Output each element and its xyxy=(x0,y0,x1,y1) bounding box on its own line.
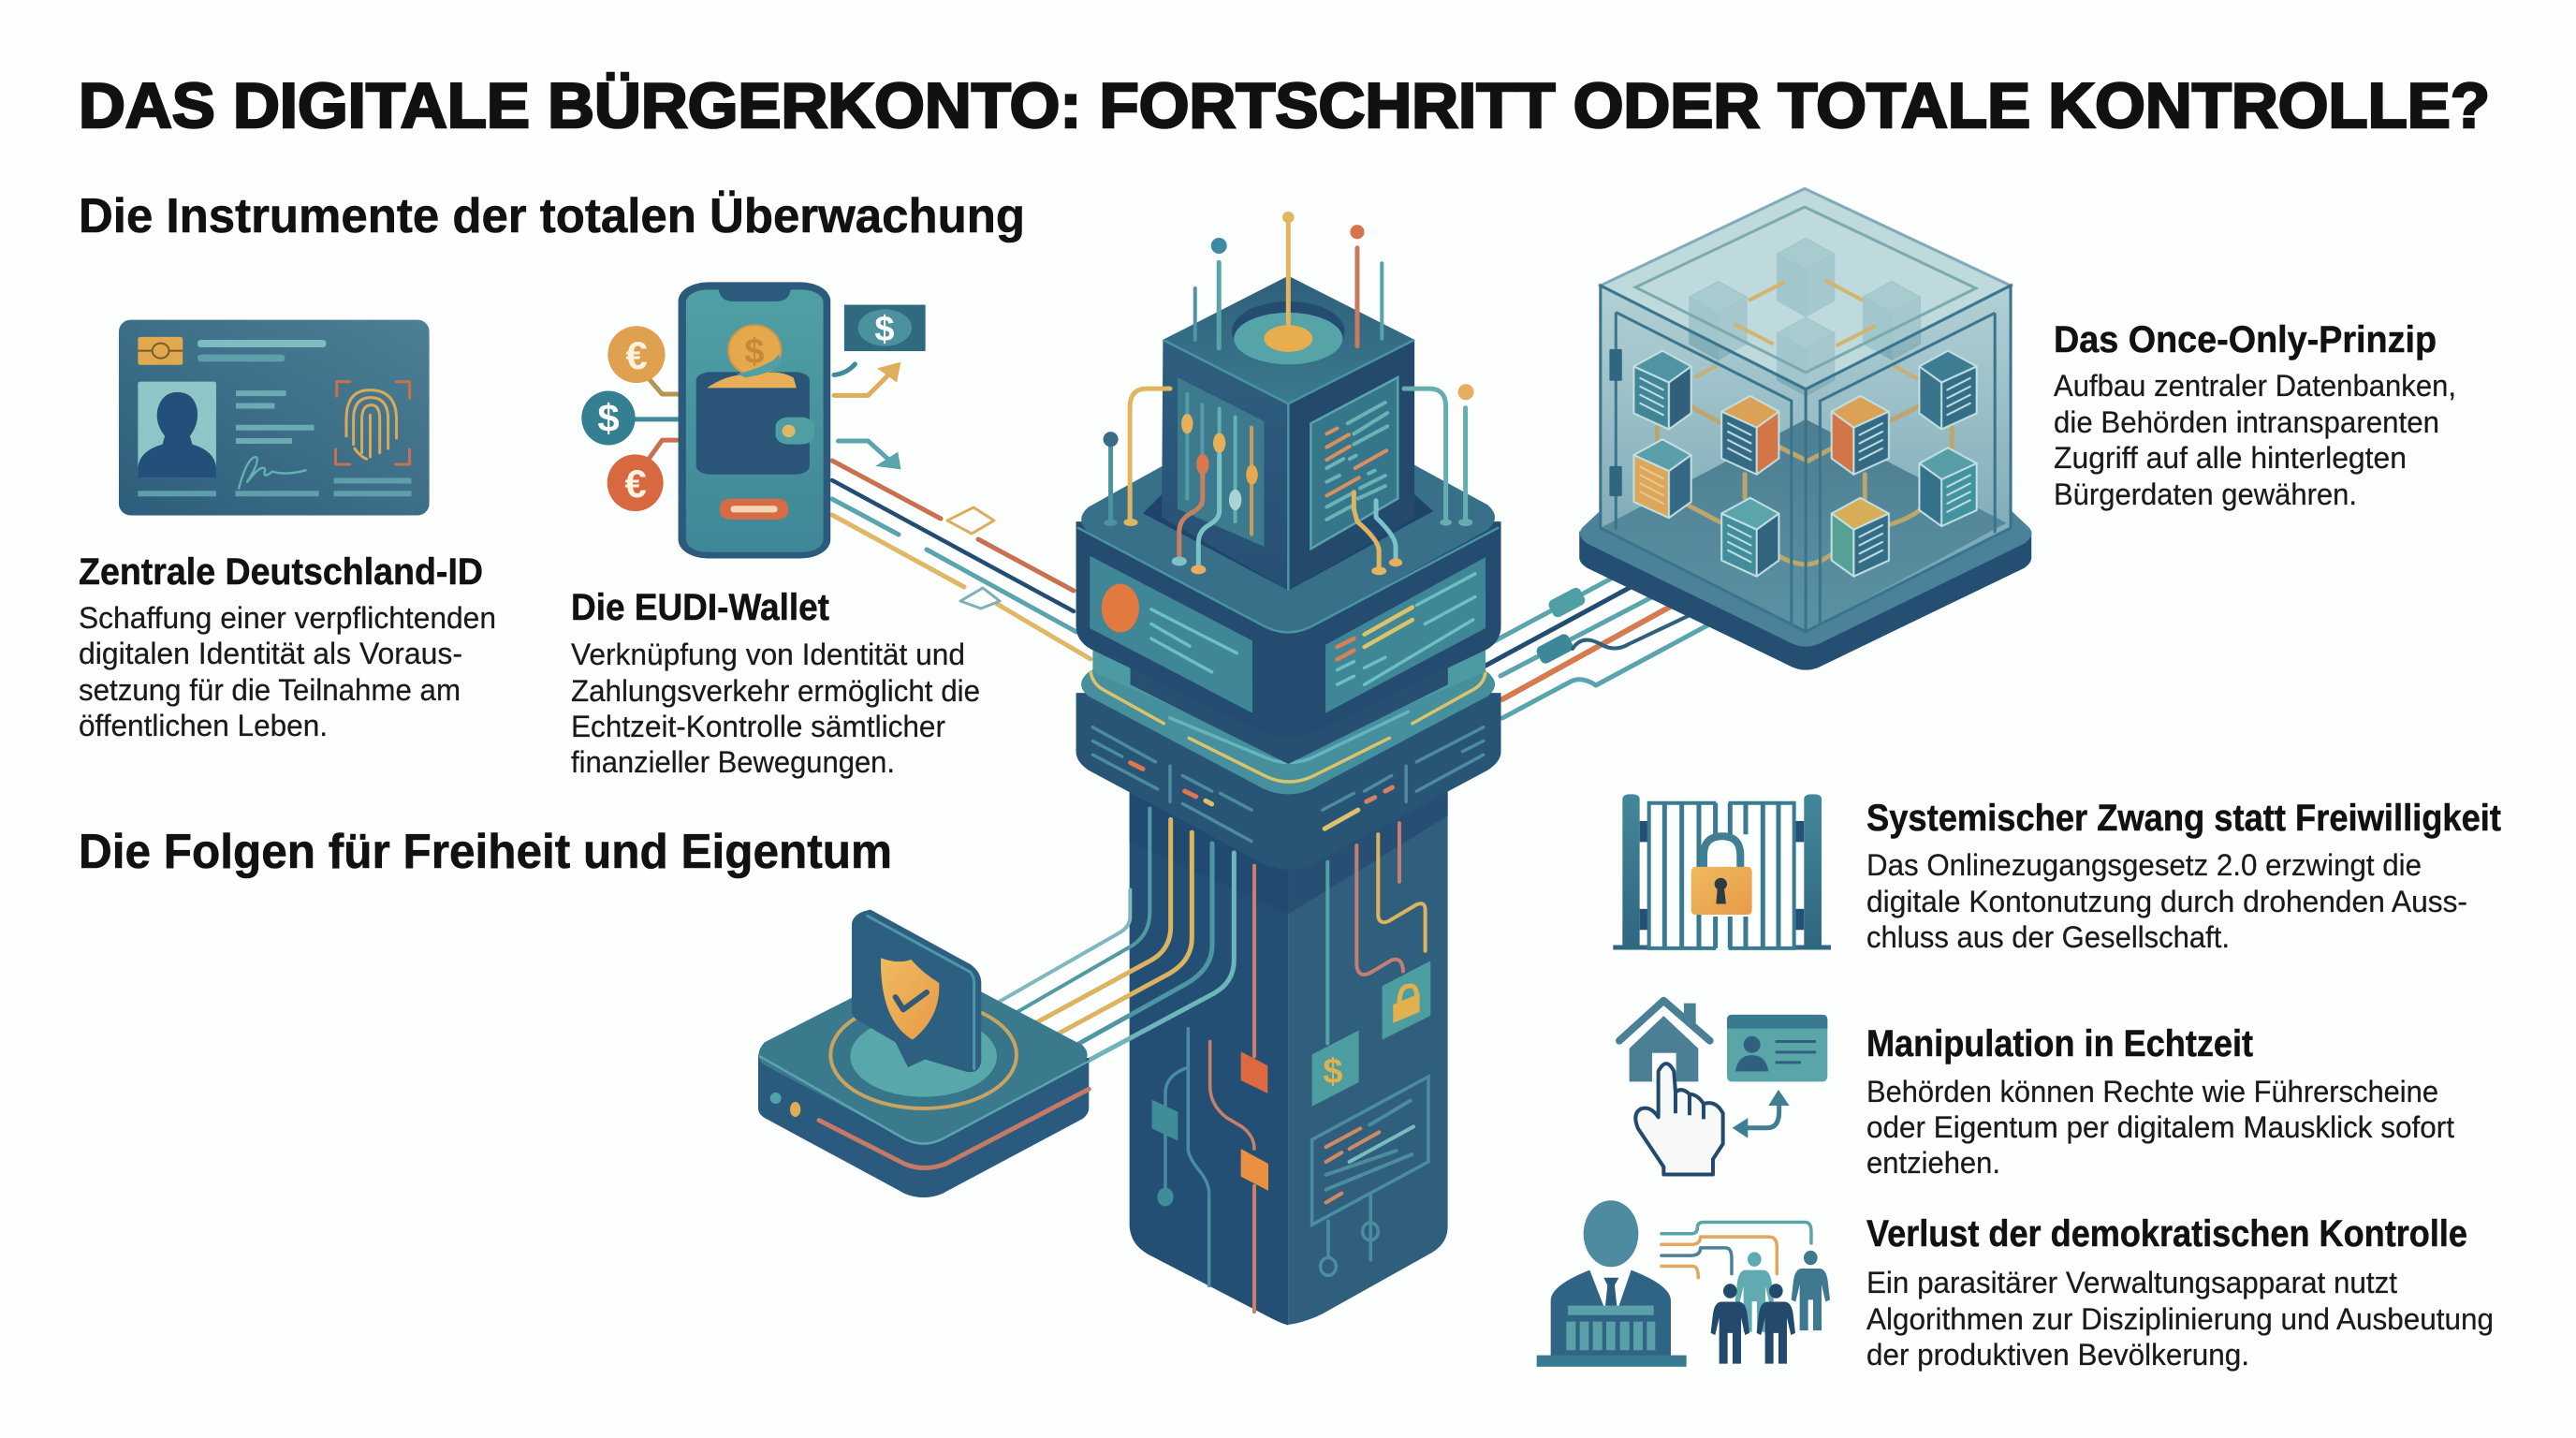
screens on block xyxy=(1090,556,1252,713)
glass cube interior xyxy=(1601,286,1806,632)
text block: Verlust der demokratischen Kontrolle: der produktiven Bevölkerung. xyxy=(1866,1338,2249,1372)
text block: Systemischer Zwang: chluss aus der Gesellschaft. xyxy=(1866,920,2230,954)
coin glyphs: $ xyxy=(597,396,620,440)
data lines: tower to database xyxy=(1484,570,1721,718)
icon: locked gate xyxy=(1613,794,1831,949)
icon: wallet phone xyxy=(581,282,926,558)
heading: consequences: Die Folgen für Freiheit und Eigentum xyxy=(79,825,892,879)
neck xyxy=(1092,649,1486,756)
text block: EUDI-Wallet: Echtzeit-Kontrolle sämtlicher xyxy=(571,710,945,743)
arrows xyxy=(834,364,895,465)
coins xyxy=(607,326,666,383)
cube recess xyxy=(1143,494,1433,591)
lower collar xyxy=(1076,693,1501,870)
antennas xyxy=(1111,223,1466,569)
central tower xyxy=(1076,212,1501,870)
text block: Zentrale Deutschland-ID: Schaffung einer verpflichtenden xyxy=(79,601,496,635)
icon: id card xyxy=(119,320,430,516)
text block: Once-Only-Prinzip: Zugriff auf alle hinterlegten xyxy=(2054,441,2407,475)
main block xyxy=(1076,521,1501,738)
text block: Manipulation in Echtzeit xyxy=(1866,1023,2454,1180)
title: DAS DIGITALE BÜRGERKONTO: FORTSCHRITT ODER TOTALE KONTROLLE? xyxy=(79,70,2490,141)
text block: Verlust der demokratischen Kontrolle: Algorithmen zur Disziplinierung und Ausbeutung xyxy=(1866,1302,2494,1336)
text block: Once-Only-Prinzip: Aufbau zentraler Datenbanken, xyxy=(2054,369,2456,403)
base plate xyxy=(1579,531,2031,670)
back faint boxes xyxy=(1690,238,1921,396)
text block: Once-Only-Prinzip: Das Once-Only-Prinzip xyxy=(2054,319,2437,360)
top glass xyxy=(1601,188,2011,389)
cube panels xyxy=(1178,377,1264,547)
text block: Zentrale Deutschland-ID: öffentlichen Leben. xyxy=(79,709,328,742)
text block: EUDI-Wallet: finanzieller Bewegungen. xyxy=(571,745,895,779)
text block: Manipulation in Echtzeit: Behörden können Rechte wie Führerscheine xyxy=(1866,1075,2438,1108)
text block: Zentrale Deutschland-ID: digitalen Identität als Voraus- xyxy=(79,637,462,670)
server boxes xyxy=(1633,351,1977,577)
text block: Once-Only-Prinzip xyxy=(2054,319,2456,511)
text block: Verlust der demokratischen Kontrolle xyxy=(1866,1213,2494,1372)
text block: Verlust der demokratischen Kontrolle: Verlust der demokratischen Kontrolle xyxy=(1866,1213,2467,1255)
text block: Manipulation in Echtzeit: entziehen. xyxy=(1866,1146,2000,1180)
icon: official and citizens xyxy=(1537,1200,1830,1367)
text block: Systemischer Zwang: Systemischer Zwang statt Freiwilligkeit xyxy=(1866,798,2501,839)
text block: Verlust der demokratischen Kontrolle: Ein parasitärer Verwaltungsapparat nutzt xyxy=(1866,1266,2397,1299)
text block: Manipulation in Echtzeit: oder Eigentum per digitalem Mausklick sofort xyxy=(1866,1110,2454,1144)
text block: Once-Only-Prinzip: die Behörden intransparenten xyxy=(2054,405,2439,439)
data lines: wallet to tower xyxy=(832,461,1090,659)
text block: EUDI-Wallet: Die EUDI-Wallet xyxy=(571,587,829,628)
code lines xyxy=(1326,403,1387,520)
phone body xyxy=(679,282,830,558)
icon: shield device xyxy=(758,910,1089,1197)
coin glyphs: € xyxy=(625,333,648,377)
text block: EUDI-Wallet: Zahlungsverkehr ermöglicht die xyxy=(571,674,980,708)
sliders xyxy=(1187,394,1251,535)
icon: central database cube xyxy=(1579,188,2031,670)
text block: Zentrale Deutschland-ID xyxy=(79,551,496,742)
glass frame xyxy=(1601,286,2011,632)
text block: Once-Only-Prinzip: Bürgerdaten gewähren. xyxy=(2054,477,2357,511)
text block: Zentrale Deutschland-ID: Zentrale Deutschland-ID xyxy=(79,551,483,593)
coin glyphs: € xyxy=(624,462,647,506)
icon: house, hand and licence xyxy=(1619,1001,1827,1175)
wires to shield device xyxy=(992,808,1234,1072)
dollar glyph on shaft: $ xyxy=(1323,1052,1343,1092)
text block: EUDI-Wallet: Verknüpfung von Identität und xyxy=(571,638,965,671)
connection links xyxy=(1657,401,1952,565)
coin glyphs xyxy=(597,310,895,506)
heading: instruments: Die Instrumente der totalen Überwachung xyxy=(79,189,1025,243)
tower shaft xyxy=(992,768,1448,1325)
text block: Systemischer Zwang: digitale Kontonutzung durch drohenden Auss- xyxy=(1866,885,2467,918)
text block: Zentrale Deutschland-ID: setzung für die Teilnahme am xyxy=(79,673,461,707)
shaft circuitry xyxy=(1165,823,1426,1312)
text block: Manipulation in Echtzeit: Manipulation in Echtzeit xyxy=(1866,1023,2253,1064)
top cube xyxy=(1162,340,1288,591)
coin glyphs: $ xyxy=(874,310,895,349)
text block: Systemischer Zwang xyxy=(1866,798,2501,954)
text block: Systemischer Zwang: Das Onlinezugangsgesetz 2.0 erzwingt die xyxy=(1866,848,2422,882)
coin glyphs: $ xyxy=(744,332,765,372)
text block: EUDI-Wallet xyxy=(571,587,980,779)
banknote xyxy=(844,305,926,351)
